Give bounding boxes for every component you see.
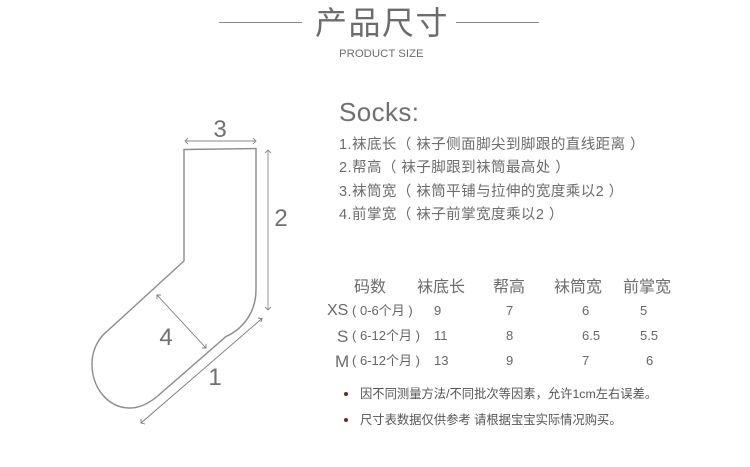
definitions block [339, 97, 645, 223]
bullet [344, 392, 348, 396]
heading: Socks: Socks: [339, 97, 419, 127]
arrow 1: sole length [141, 318, 262, 424]
row S: 8 [506, 328, 513, 343]
row M: 6 [646, 353, 653, 368]
label 2: 2 [274, 205, 288, 232]
row M: ( 6-12个月 ) [352, 353, 420, 368]
row M: 7 [582, 353, 589, 368]
row XS: XS [327, 302, 348, 319]
label 1: 1 [208, 364, 222, 391]
table header: 袜筒宽 [554, 279, 602, 296]
note 1: 因不同测量方法/不同批次等因素，允许1cm左右误差。 [360, 387, 657, 401]
sock outline [92, 148, 256, 408]
arrow 3: cuff width [185, 138, 256, 144]
row XS: ( 0-6个月 ) [352, 303, 413, 318]
row S [337, 327, 658, 346]
arrow 4: forefoot width [157, 295, 206, 348]
row XS [327, 302, 647, 319]
row M: 9 [506, 353, 513, 368]
definition 2: 2.帮高（ 袜子脚跟到袜筒最高处 ） [339, 160, 570, 176]
row S: 11 [434, 328, 448, 343]
row XS: 5 [640, 303, 647, 318]
definition 3: 3.袜筒宽（ 袜筒平铺与拉伸的宽度乘以2 ） [339, 184, 624, 200]
row M [335, 352, 653, 371]
row S: 5.5 [640, 328, 658, 343]
table header [354, 278, 671, 296]
bullet [344, 418, 348, 422]
row XS: 9 [434, 303, 441, 318]
row XS: 7 [506, 303, 513, 318]
row S: ( 6-12个月 ) [352, 328, 420, 343]
title rule left [219, 22, 302, 23]
table header: 码数 [354, 279, 386, 296]
subtitle: PRODUCT SIZE [339, 48, 424, 60]
row XS: 6 [582, 303, 589, 318]
label 4: 4 [159, 324, 173, 351]
note 2: 尺寸表数据仅供参考 请根据宝宝实际情况购买。 [360, 413, 622, 427]
row M: 13 [434, 353, 448, 368]
row S: S [337, 327, 348, 346]
table header: 袜底长 [417, 279, 465, 296]
title rule right [456, 22, 539, 23]
label 3: 3 [213, 116, 227, 143]
definition 4: 4.前掌宽（ 袜子前掌宽度乘以2 ） [339, 207, 564, 223]
row S: 6.5 [582, 328, 600, 343]
table header: 前掌宽 [623, 279, 671, 296]
title: 产品尺寸 [315, 5, 449, 41]
table header: 帮高 [493, 279, 525, 296]
size table [327, 278, 671, 371]
definition 1: 1.袜底长（ 袜子侧面脚尖到脚跟的直线距离 ） [339, 137, 645, 153]
row M: M [335, 352, 349, 371]
arrow 2: leg height [265, 150, 271, 310]
